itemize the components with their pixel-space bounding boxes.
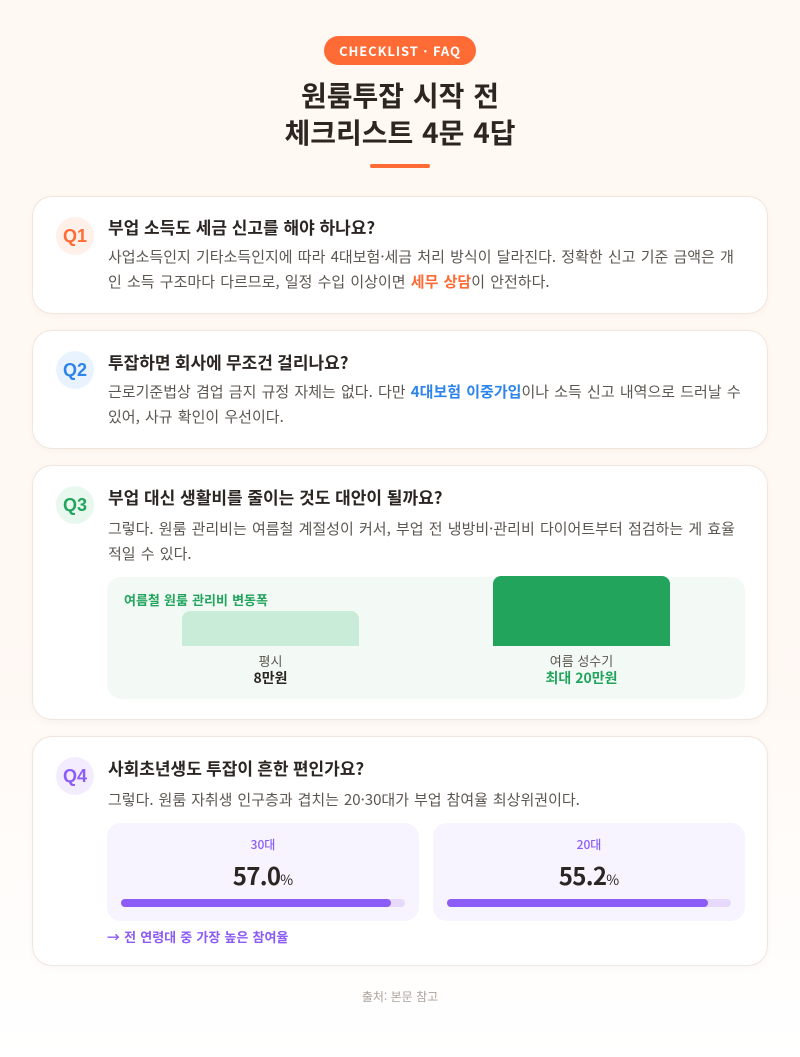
answer 2: 있어, 사규 확인이 우선이다. — [108, 406, 284, 427]
progress bar: 20s — [447, 899, 731, 907]
answer 2: 근로기준법상 겸업 금지 규정 자체는 없다. 다만 4대보험 이중가입이나 소득 신고 내역으로 드러날 수 — [108, 381, 741, 402]
answer 2 — [108, 381, 741, 427]
label: normal: 평시 — [259, 651, 282, 670]
value: normal: 8만원 — [253, 668, 288, 688]
value: 57.0%: 57.0% — [233, 857, 293, 892]
label: 20s: 20대 — [577, 836, 601, 853]
value: 55.2%: 55.2% — [559, 857, 619, 892]
badge: checklist faq — [324, 36, 476, 65]
note: → 전 연령대 중 가장 높은 참여율 — [107, 927, 288, 946]
question 1: 부업 소득도 세금 신고를 해야 하나요? — [108, 214, 375, 239]
panel: Q3 — [32, 465, 768, 720]
icon: Q3 badge — [56, 486, 94, 524]
title — [284, 75, 516, 152]
label: peak summer: 여름 성수기 — [550, 651, 613, 670]
icon: Q3 badge: Q3 — [63, 495, 87, 515]
panel: Q1 — [32, 196, 768, 314]
value: peak summer: 최대 20만원 — [546, 668, 617, 688]
icon: Q2 badge — [56, 351, 94, 389]
answer 4: 그렇다. 원룸 자취생 인구층과 겹치는 20·30대가 부업 참여율 최상위권이다. — [108, 789, 580, 810]
panel: Q2 — [32, 330, 768, 449]
stat card: 20s — [433, 823, 745, 921]
question 3: 부업 대신 생활비를 줄이는 것도 대안이 될까요? — [108, 484, 442, 509]
answer 3: 그렇다. 원룸 관리비는 여름철 계절성이 커서, 부업 전 냉방비·관리비 다이어트부터 점검하는 게 효율 — [108, 518, 735, 539]
chart title: 여름철 원룸 관리비 변동폭 — [124, 590, 268, 609]
badge: checklist faq: CHECKLIST · FAQ — [339, 41, 461, 60]
answer 1 — [108, 246, 734, 292]
bar chart: summer management fee — [107, 577, 745, 699]
header — [284, 36, 516, 168]
source: 출처: 본문 참고 — [362, 988, 438, 1005]
answer 1: 사업소득인지 기타소득인지에 따라 4대보험·세금 처리 방식이 달라진다. 정확한 신고 기준 금액은 개 — [108, 246, 734, 267]
icon: Q2 badge: Q2 — [63, 360, 87, 380]
bar: peak summer — [493, 576, 670, 646]
label: 30s: 30대 — [251, 836, 275, 853]
icon: Q1 badge — [56, 217, 94, 255]
answer 3: 적일 수 있다. — [108, 543, 192, 564]
icon: Q1 badge: Q1 — [63, 226, 87, 246]
stat card: 30s — [107, 823, 419, 921]
answer 3 — [108, 518, 735, 564]
progress bar: 30s — [121, 899, 405, 907]
icon: Q4 badge: Q4 — [63, 766, 87, 786]
title underline — [370, 164, 430, 168]
question 2: 투잡하면 회사에 무조건 걸리나요? — [108, 349, 348, 374]
icon: Q4 badge — [56, 757, 94, 795]
panel: Q4 — [32, 736, 768, 966]
answer 1: 인 소득 구조마다 다르므로, 일정 수입 이상이면 세무 상담이 안전하다. — [108, 271, 550, 292]
bar: normal — [182, 611, 359, 646]
question 4: 사회초년생도 투잡이 흔한 편인가요? — [108, 755, 364, 780]
title: 원룸투잡 시작 전 — [301, 75, 499, 115]
title: 체크리스트 4문 4답 — [284, 112, 516, 152]
